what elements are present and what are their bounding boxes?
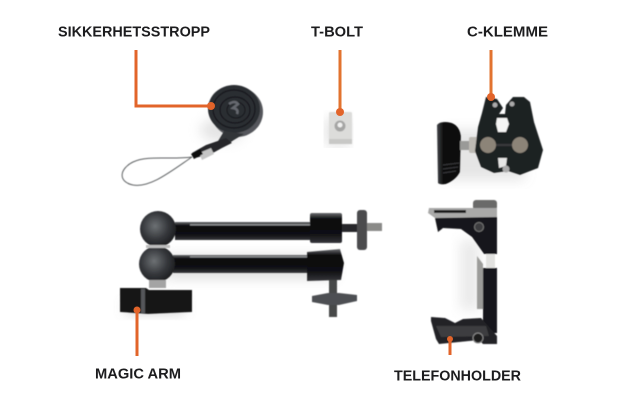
arrow: safety strap leader bbox=[136, 50, 215, 110]
heading: T-bolt label: T-BOLT bbox=[311, 24, 363, 40]
heading: C-clamp label: C-KLEMME bbox=[467, 24, 548, 40]
arrow: magic arm leader bbox=[134, 306, 140, 356]
arrow: T-bolt leader bbox=[336, 50, 344, 116]
clamp base bbox=[120, 280, 192, 314]
lower rod bbox=[139, 245, 344, 282]
arrow: phone holder leader bbox=[447, 336, 453, 355]
icon: C-clamp bbox=[437, 97, 543, 184]
icon: phone holder bbox=[428, 200, 497, 344]
locking knob bbox=[312, 280, 357, 317]
icon: safety strap bbox=[122, 85, 263, 185]
icon: T-bolt plate bbox=[325, 112, 352, 146]
heading: phone holder label: TELEFONHOLDER bbox=[394, 368, 522, 384]
heading: safety strap label: SIKKERHETSSTROPP bbox=[58, 24, 210, 40]
upper rod bbox=[140, 210, 382, 250]
icon: magic arm bbox=[120, 210, 382, 317]
heading: magic arm label: MAGIC ARM bbox=[95, 366, 181, 382]
arrow: C-clamp leader bbox=[487, 50, 495, 101]
